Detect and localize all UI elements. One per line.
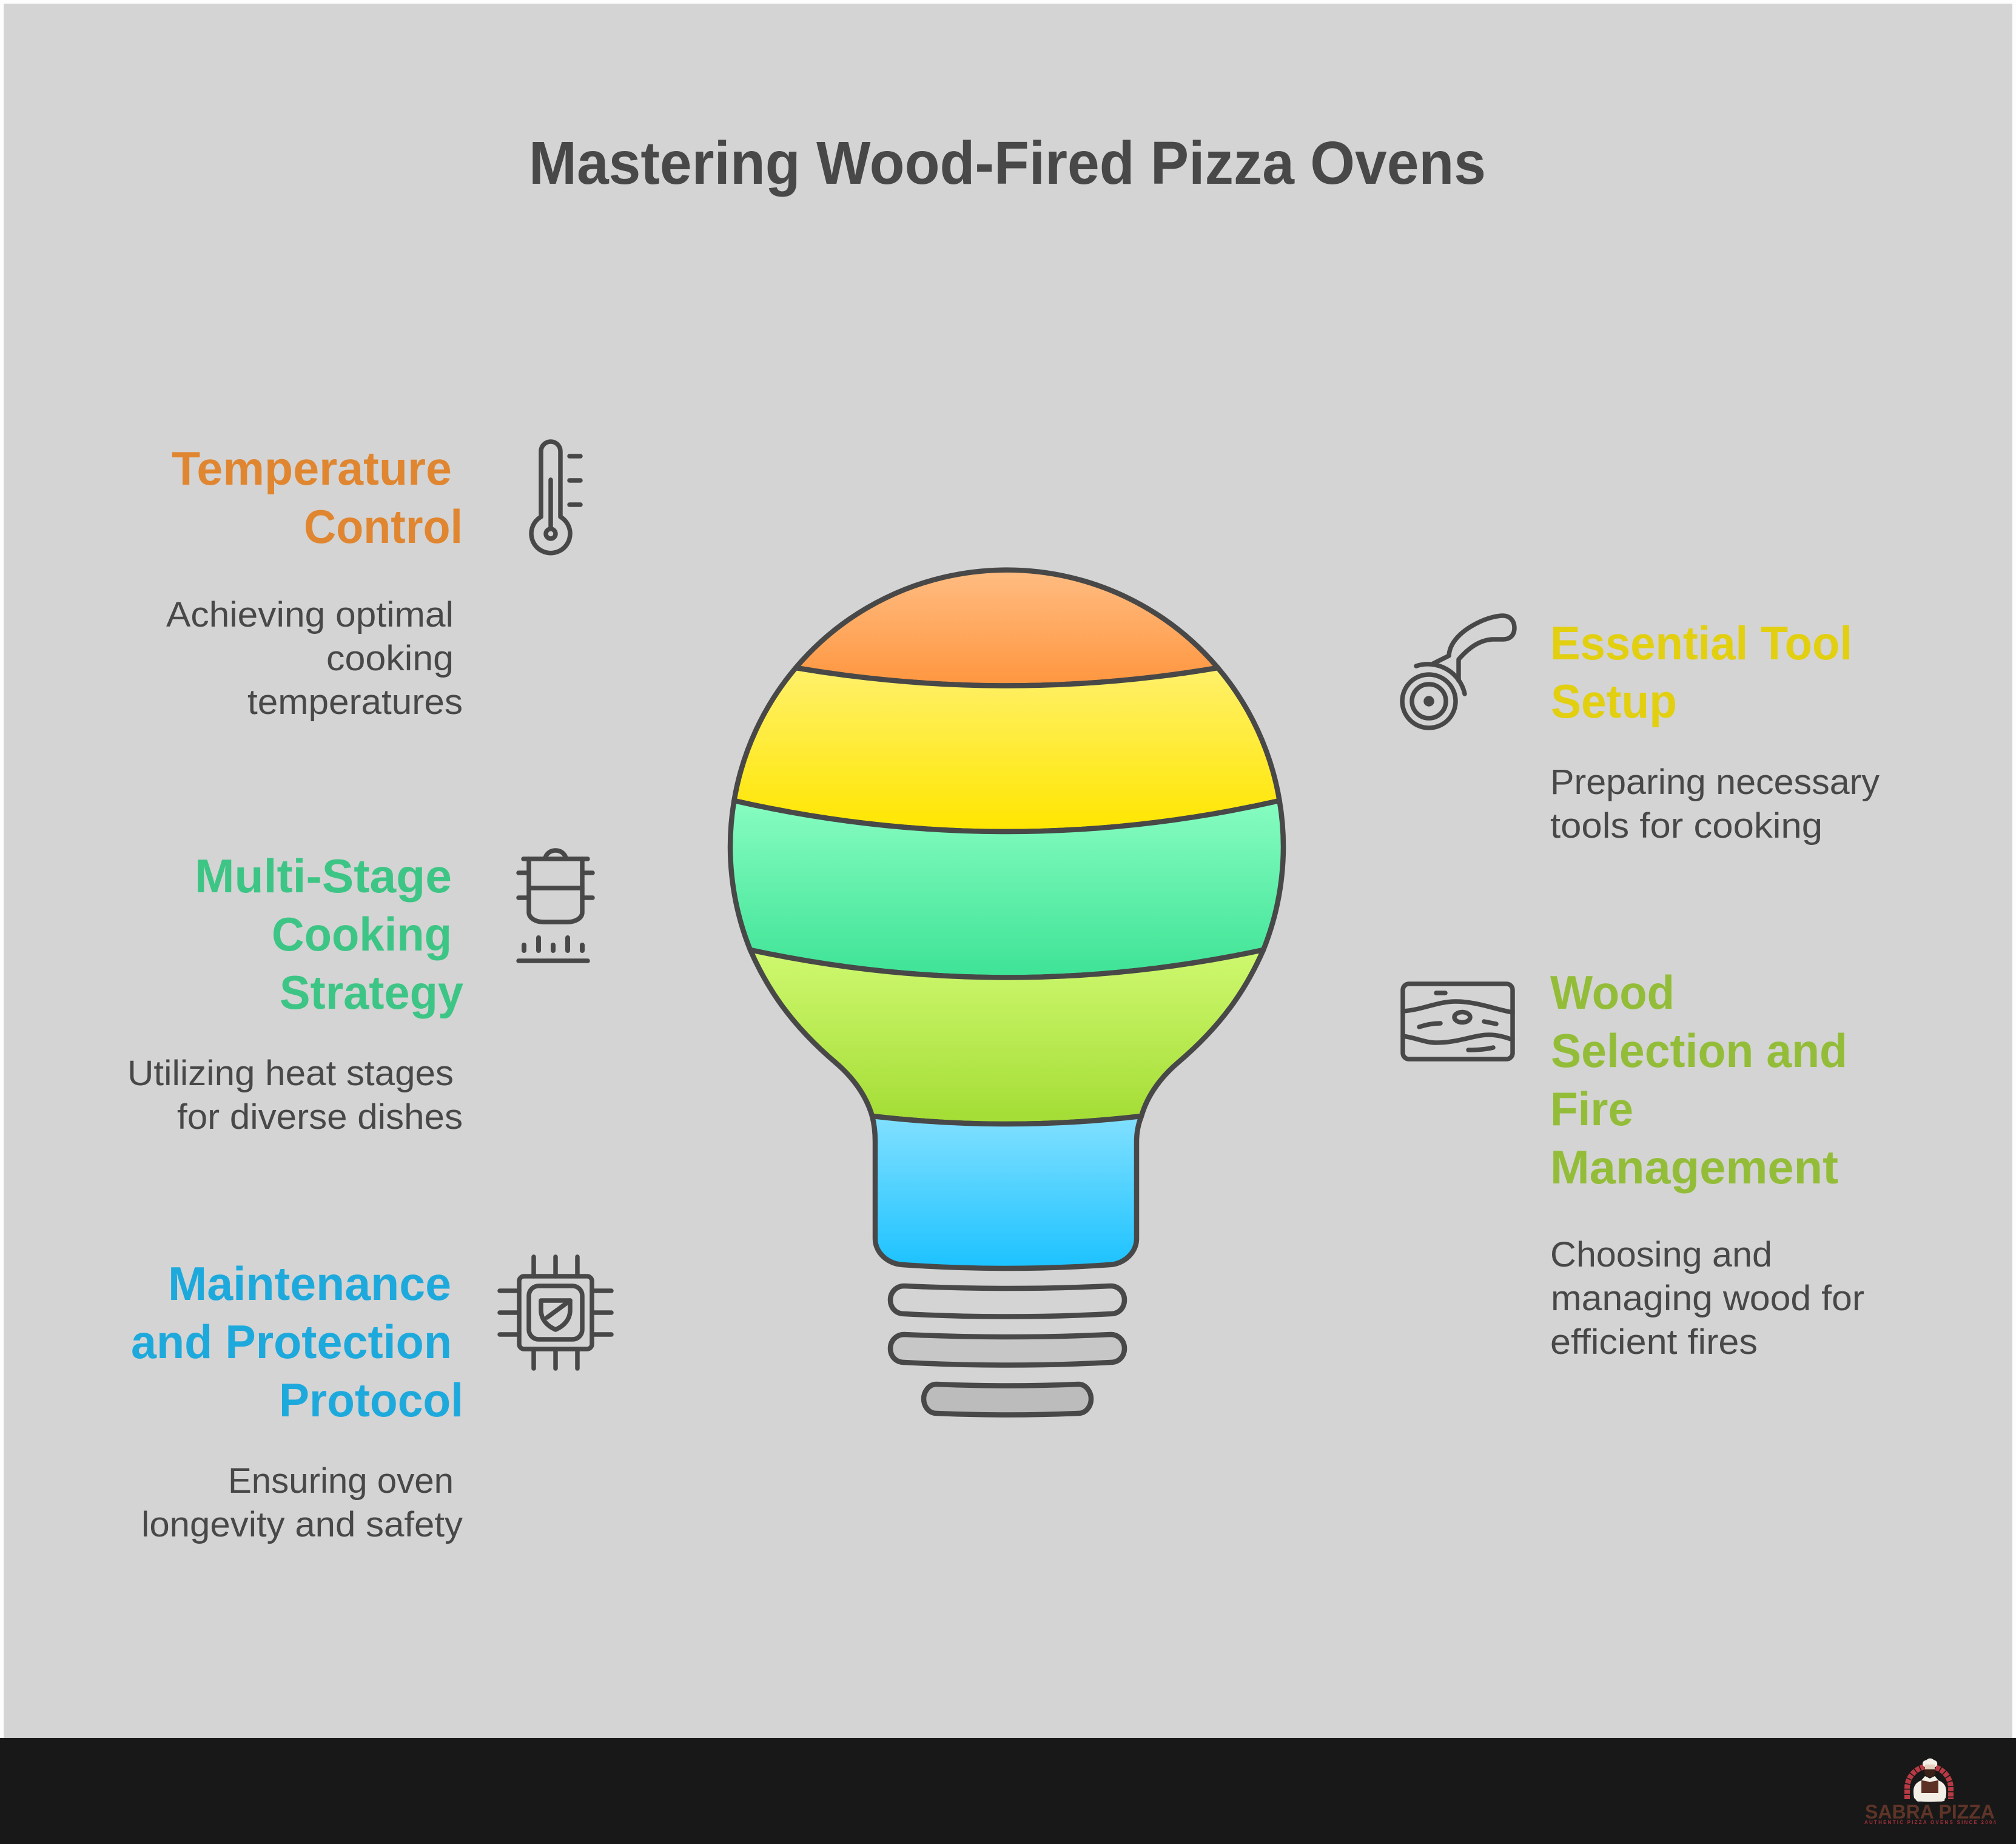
description: Wood Selection and Fire Management: efficient fires — [1550, 1322, 1758, 1362]
description: Essential Tool Setup — [1550, 762, 1880, 846]
description: Temperature Control: cooking — [326, 639, 454, 678]
block: Multi-Stage Cooking Strategy — [127, 849, 463, 1137]
heading: Temperature Control — [172, 442, 463, 553]
heading: Maintenance and Protection Protocol — [131, 1257, 463, 1427]
logo arch — [1907, 1766, 1950, 1799]
description: Wood Selection and Fire Management: managing wood for — [1551, 1279, 1864, 1318]
icon: thermometer — [531, 442, 580, 553]
heading: Wood Selection and Fire Management: Management — [1550, 1140, 1838, 1194]
description: Essential Tool Setup: Preparing necessary — [1550, 762, 1880, 802]
block: Wood Selection and Fire Management — [1550, 966, 1864, 1362]
heading: Maintenance and Protection Protocol: Protocol — [279, 1373, 463, 1427]
screw thread 2 — [890, 1334, 1124, 1365]
heading: Essential Tool Setup: Essential Tool — [1550, 616, 1852, 670]
logo chef — [1914, 1758, 1946, 1802]
description: Temperature Control: Achieving optimal — [166, 595, 454, 634]
heading: Maintenance and Protection Protocol: Maintenance — [168, 1257, 451, 1310]
screw thread 1 — [890, 1286, 1124, 1316]
icon: wood plank — [1403, 984, 1513, 1059]
heading: Temperature Control: Temperature — [172, 442, 452, 495]
heading: Temperature Control: Control — [304, 500, 463, 553]
title: Mastering Wood-Fired Pizza Ovens — [529, 129, 1486, 197]
logo tagline: AUTHENTIC PIZZA OVENS SINCE 2004 — [1864, 1820, 1997, 1825]
heading: Wood Selection and Fire Management: Selection and — [1551, 1024, 1847, 1077]
heading: Multi-Stage Cooking Strategy: Multi-Stage — [195, 849, 452, 903]
heading: Wood Selection and Fire Management: Fire — [1550, 1082, 1633, 1136]
icon: steamer pot — [519, 850, 593, 961]
bulb segment: yellow — [734, 668, 1280, 832]
bulb segment: orange — [796, 570, 1218, 685]
description: Maintenance and Protection Protocol — [141, 1461, 463, 1544]
heading: Multi-Stage Cooking Strategy — [195, 849, 463, 1019]
description: Multi-Stage Cooking Strategy — [127, 1054, 463, 1137]
description: Maintenance and Protection Protocol: Ensuring oven — [228, 1461, 454, 1501]
description: Wood Selection and Fire Management — [1550, 1235, 1864, 1362]
description: Maintenance and Protection Protocol: longevity and safety — [141, 1505, 463, 1544]
description: Temperature Control — [166, 595, 463, 722]
heading: Multi-Stage Cooking Strategy: Strategy — [280, 966, 463, 1019]
logo wordmark: SABRA PIZZA — [1865, 1801, 1995, 1823]
description: Essential Tool Setup: tools for cooking — [1550, 806, 1823, 846]
heading: Wood Selection and Fire Management — [1550, 966, 1847, 1194]
icon: pizza cutter — [1402, 616, 1514, 728]
description: Wood Selection and Fire Management: Choosing and — [1550, 1235, 1772, 1274]
heading: Essential Tool Setup — [1550, 616, 1852, 728]
heading: Maintenance and Protection Protocol: and Protection — [131, 1315, 452, 1368]
block: Essential Tool Setup — [1550, 616, 1880, 846]
icon: chip with shield — [500, 1257, 611, 1368]
screw thread 3 — [924, 1384, 1091, 1415]
footer band — [0, 1738, 2016, 1844]
heading: Wood Selection and Fire Management: Wood — [1550, 966, 1675, 1019]
description: Multi-Stage Cooking Strategy: Utilizing heat stages — [127, 1054, 454, 1093]
bulb segment: blue neck — [872, 1116, 1141, 1268]
description: Temperature Control: temperatures — [247, 682, 463, 722]
heading: Essential Tool Setup: Setup — [1551, 675, 1677, 728]
logo: Sabra Pizza — [1864, 1758, 1997, 1825]
bulb segment: green — [730, 801, 1283, 978]
block: Maintenance and Protection Protocol — [131, 1257, 463, 1544]
bulb segment: lime — [750, 950, 1263, 1124]
heading: Multi-Stage Cooking Strategy: Cooking — [272, 907, 452, 961]
light bulb diagram — [730, 570, 1283, 1415]
description: Multi-Stage Cooking Strategy: for diverse dishes — [177, 1097, 463, 1137]
block: Temperature Control — [166, 442, 463, 722]
